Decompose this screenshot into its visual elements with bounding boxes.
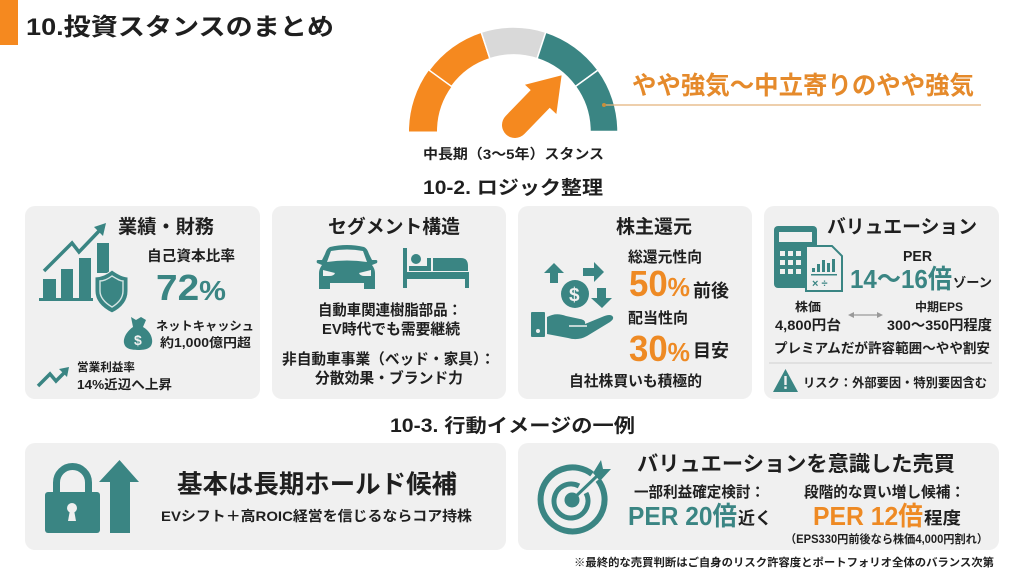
heading: segments: セグメント構造	[328, 215, 460, 238]
staged buying: PER 12倍	[813, 501, 923, 531]
operating margin: 営業利益率	[77, 360, 135, 374]
panel: shareholder returns	[518, 206, 752, 399]
total payout	[628, 249, 729, 304]
buyback text: 自社株買いも積極的	[569, 372, 702, 390]
dividend payout	[628, 309, 729, 369]
net cash: 約1,000億円超	[160, 335, 252, 350]
icon: calculator and document	[774, 226, 842, 291]
partial profit taking: PER 20倍	[628, 501, 737, 531]
trading headline: バリュエーションを意識した売買	[637, 453, 955, 476]
icon: warning triangle	[773, 369, 798, 392]
share price	[775, 299, 841, 333]
icon: bed	[403, 248, 469, 288]
icon: money bag	[124, 317, 152, 350]
panel: valuation-aware trading	[518, 443, 999, 550]
operating margin	[77, 360, 172, 392]
dividend payout: 30%	[629, 328, 690, 369]
net cash	[156, 319, 254, 350]
staged buying: （EPS330円前後なら株価4,000円割れ）	[785, 532, 988, 546]
panel: segment structure	[272, 206, 506, 399]
equity ratio value: 72%	[156, 267, 226, 308]
title	[0, 0, 334, 45]
heading: valuation: バリュエーション	[827, 216, 977, 238]
icon: growth chart and shield	[39, 223, 128, 313]
PER range: 14～16倍	[850, 264, 952, 294]
PER range: ゾーン	[953, 275, 992, 290]
partial profit taking: 近く	[738, 509, 772, 528]
icon: calculator and document: × ÷	[812, 278, 828, 290]
risk note: リスク：外部要因・特別要因含む	[803, 375, 987, 390]
icon: car	[317, 245, 377, 289]
icon: money bag: $	[134, 332, 142, 348]
panel: long-term hold	[25, 443, 506, 550]
panel: results and finances	[25, 206, 260, 399]
partial profit taking: 一部利益確定検討：	[634, 483, 765, 501]
footnote: ※最終的な売買判断はご自身のリスク許容度とポートフォリオ全体のバランス次第	[574, 555, 994, 569]
heading: returns: 株主還元	[616, 216, 692, 238]
non-automotive business text: 分散効果・ブランド力	[315, 369, 463, 387]
non-automotive business text: 非自動車事業（ベッド・家具）：	[282, 350, 495, 368]
staged buying	[785, 483, 988, 546]
mid-term EPS: 300～350円程度	[887, 317, 992, 333]
total payout: 前後	[693, 281, 729, 301]
equity ratio label: 自己資本比率	[147, 247, 235, 265]
dividend payout: 目安	[693, 341, 729, 361]
mid-term EPS: 中期EPS	[915, 299, 963, 314]
icon: hand with coin and arrows: $	[569, 285, 580, 306]
heading: 10-3: 10-3. 行動イメージの一例	[390, 415, 635, 437]
stance headline: やや強気～中立寄りのやや強気	[632, 72, 974, 100]
staged buying: 程度	[924, 509, 961, 528]
automotive resin parts text: 自動車関連樹脂部品：	[318, 301, 462, 319]
net cash: ネットキャッシュ	[156, 319, 254, 333]
heading: results: 業績・財務	[118, 216, 214, 238]
arrow: gauge needle	[515, 76, 561, 125]
icon: small trend arrow	[38, 367, 69, 386]
staged buying: 段階的な買い増し候補：	[804, 483, 965, 501]
automotive resin parts text	[318, 301, 462, 338]
icon: lock and up arrow	[45, 460, 139, 533]
hold subtext: EVシフト＋高ROIC経営を信じるならコア持株	[161, 508, 472, 524]
automotive resin parts text: EV時代でも需要継続	[322, 321, 460, 338]
dividend payout: 配当性向	[628, 309, 688, 327]
mid-term EPS	[887, 299, 992, 333]
total payout: 総還元性向	[628, 249, 702, 266]
gauge label: 中長期（3～5年）スタンス	[423, 146, 604, 162]
heading: 10-2: 10-2. ロジック整理	[423, 177, 603, 199]
hold headline: 基本は長期ホールド候補	[177, 471, 457, 499]
share price: 株価	[795, 299, 821, 314]
arrow: double headed	[848, 312, 883, 318]
title: 10.投資スタンスのまとめ	[26, 14, 334, 41]
non-automotive business text	[282, 350, 495, 387]
operating margin: 14%近辺へ上昇	[77, 377, 172, 392]
share price: 4,800円台	[775, 317, 841, 333]
panel: valuation	[764, 206, 999, 399]
icon: hand with coin and arrows	[531, 262, 613, 339]
PER label: PER	[903, 248, 932, 265]
total payout: 50%	[629, 263, 690, 304]
valuation verdict: プレミアムだが許容範囲～やや割安	[774, 340, 990, 356]
partial profit taking	[628, 483, 772, 531]
icon: target with arrow	[541, 460, 611, 531]
gauge: mid-to-long-term stance	[409, 27, 618, 131]
